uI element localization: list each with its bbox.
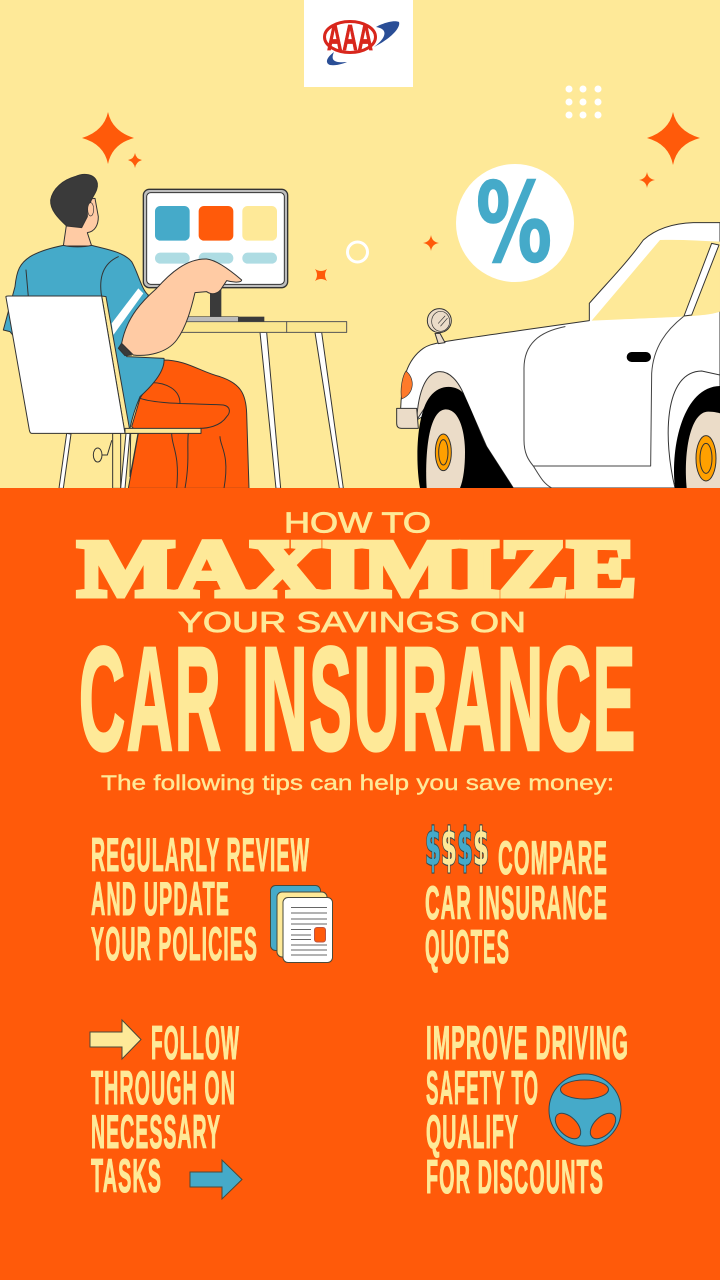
tip: improve driving: SAFETY TO	[426, 1062, 539, 1115]
tip: regularly review	[91, 829, 310, 971]
icon: documents	[270, 886, 332, 962]
tip: follow through: TASKS	[91, 1150, 162, 1203]
icon: dollar signs: $	[425, 818, 441, 878]
dot grid	[566, 86, 602, 118]
head and hair	[51, 174, 98, 246]
icon: dollar signs: $	[457, 818, 473, 878]
subheading: The following tips can help you save money:	[101, 771, 614, 795]
chair legs	[59, 433, 138, 488]
door	[524, 317, 683, 488]
arm pointing at screen	[118, 259, 242, 356]
side mirror	[427, 309, 451, 344]
tip: improve driving	[426, 1017, 629, 1204]
icon: percent badge: %	[476, 159, 552, 287]
windshield	[592, 240, 720, 321]
bumper	[397, 408, 418, 428]
car body	[401, 223, 720, 488]
tip: regularly review: AND UPDATE	[91, 873, 230, 926]
text: NECESSARY	[91, 1106, 221, 1159]
heading line: maximize: MAXIMIZE	[78, 526, 636, 614]
rear wheel	[668, 371, 720, 488]
text: FOLLOW	[151, 1017, 240, 1070]
panel: orange content area	[0, 488, 720, 1280]
heading line: how to: HOW TO	[284, 508, 431, 540]
heading	[78, 508, 637, 782]
front light	[401, 371, 412, 399]
logo: AAA: AAA	[327, 17, 373, 58]
desk	[177, 322, 347, 488]
tip: improve driving: QUALIFY	[426, 1106, 519, 1159]
panel: illustration background	[0, 0, 720, 488]
chair back	[6, 296, 201, 433]
illustration: man at desk with monitor	[3, 174, 347, 488]
icon: dollar signs	[425, 818, 489, 878]
tip: compare quotes: $	[473, 818, 489, 878]
heading line: your savings on: YOUR SAVINGS ON	[178, 607, 526, 639]
icon: dollar signs: $	[441, 818, 457, 878]
windshield pillar	[684, 243, 719, 316]
ring accent	[348, 242, 368, 262]
tip: regularly review: YOUR POLICIES	[91, 918, 258, 971]
monitor	[143, 189, 288, 322]
logo: AAA	[304, 0, 413, 87]
trousers	[128, 360, 249, 488]
icon: blue arrow	[190, 1160, 242, 1199]
decorative stars	[82, 112, 700, 281]
tip: follow through	[90, 1017, 242, 1203]
text: REGULARLY REVIEW	[91, 829, 310, 882]
icon: steering wheel	[549, 1074, 621, 1146]
icon: cream arrow	[90, 1020, 141, 1059]
tip: compare quotes: QUOTES	[425, 921, 510, 974]
tip: compare quotes	[425, 818, 608, 974]
front wheel	[417, 387, 513, 488]
front wheel arch	[417, 372, 463, 420]
text: THROUGH ON	[91, 1062, 236, 1115]
shirt	[3, 245, 164, 428]
illustration: white car	[397, 223, 720, 488]
